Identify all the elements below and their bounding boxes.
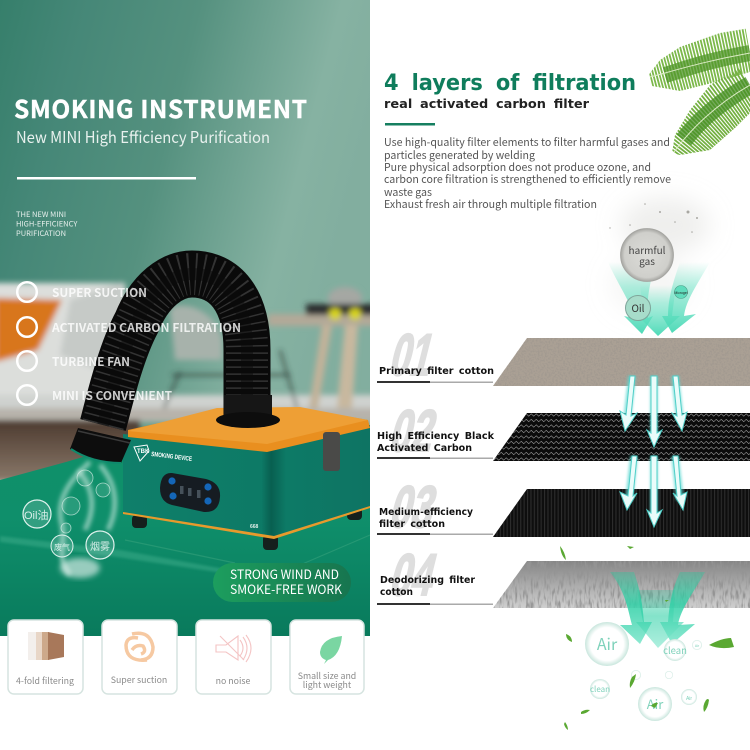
smoke bubble: oil: Oil油 bbox=[24, 508, 48, 522]
flow arrows layer 1 to 2 bbox=[620, 376, 687, 447]
layer label: cotton bbox=[380, 587, 413, 598]
layer surface bbox=[493, 338, 750, 386]
smoke bubble: smoke: 烟雾 bbox=[90, 540, 110, 553]
intake arrows bbox=[608, 262, 710, 336]
heading: 4 layers of filtration bbox=[384, 71, 636, 96]
bubble: air bottom: Air bbox=[647, 694, 664, 713]
leader line bbox=[377, 457, 493, 459]
layer label: Primary filter cotton bbox=[379, 366, 494, 377]
falling leaves bbox=[560, 546, 734, 730]
leader line bbox=[377, 381, 493, 383]
green rule bbox=[385, 123, 435, 126]
smoke cloud bbox=[609, 197, 710, 315]
card: small size bbox=[290, 620, 364, 694]
smoke bubbles: small bbox=[61, 470, 110, 533]
feature list: TURBINE FAN bbox=[52, 353, 130, 370]
outflow arrows bbox=[610, 572, 705, 648]
bubble: harmful gas: gas bbox=[639, 253, 655, 268]
model label: 668 bbox=[250, 524, 259, 530]
machine body bbox=[123, 425, 370, 537]
control display bbox=[160, 473, 220, 512]
feature list: ACTIVATED CARBON FILTRATION bbox=[51, 319, 241, 336]
layer label: Activated Carbon bbox=[377, 443, 472, 454]
bubble: microgel bbox=[674, 286, 688, 298]
hose bbox=[103, 274, 247, 425]
layer label: Medium-efficiency bbox=[379, 507, 474, 518]
bubble: air large: Air bbox=[597, 631, 618, 655]
card: small size: Small size and bbox=[298, 669, 356, 682]
card: no noise bbox=[196, 620, 271, 694]
layer surface bbox=[493, 413, 750, 461]
green table bbox=[0, 440, 370, 636]
bubble: air small: Air bbox=[686, 696, 692, 702]
bubble: harmful gas: harmful bbox=[628, 242, 666, 257]
panel: filtration bbox=[377, 53, 750, 730]
blurred room background bbox=[0, 282, 380, 482]
description: Use high-quality filter elements to filter harmful gases and bbox=[384, 134, 670, 150]
hose nozzle bbox=[70, 428, 131, 463]
bubble: microgel: Microgel bbox=[674, 291, 688, 295]
layer surface bbox=[493, 561, 750, 608]
orange lid bbox=[128, 417, 370, 452]
feature cards bbox=[8, 620, 364, 694]
description: waste gas bbox=[384, 184, 432, 200]
small caption: HIGH-EFFICIENCY bbox=[16, 218, 77, 230]
leader line bbox=[377, 533, 493, 535]
handle bbox=[323, 432, 340, 471]
ghost number 04: 04 bbox=[385, 543, 443, 609]
callout pill: SMOKE-FREE WORK bbox=[230, 579, 343, 598]
air bubbles bbox=[585, 622, 702, 721]
feature list: MINI IS CONVENIENT bbox=[52, 387, 172, 404]
bubble: clean tiny bbox=[631, 670, 673, 680]
card: 4-fold filtering bbox=[8, 620, 83, 694]
wall background bbox=[0, 0, 370, 430]
layer 4 bbox=[377, 543, 750, 609]
card: super suction: Super suction bbox=[111, 673, 167, 686]
card: 4-fold filtering: 4-fold filtering bbox=[16, 674, 74, 687]
layer surface bbox=[493, 489, 750, 537]
layer 1 bbox=[377, 323, 750, 389]
subtitle: New MINI High Efficiency Purification bbox=[16, 124, 270, 148]
palm leaves bbox=[650, 53, 750, 152]
ghost number 03: 03 bbox=[385, 475, 443, 541]
ghost number 02: 02 bbox=[385, 399, 443, 465]
divider bbox=[17, 177, 196, 180]
description: Pure physical adsorption does not produce ozone, and bbox=[384, 159, 651, 175]
subheading: real activated carbon filter bbox=[384, 97, 589, 111]
bubble: oil bbox=[626, 296, 650, 320]
bubble: air tiny: Air bbox=[695, 644, 700, 648]
logo: TBK bbox=[137, 449, 150, 455]
feature list: SUPER SUCTION bbox=[52, 284, 147, 301]
machine feet bbox=[132, 510, 362, 550]
icon: swirl bbox=[126, 633, 153, 660]
lid top face bbox=[128, 407, 368, 444]
smoking instrument machine bbox=[123, 407, 370, 550]
icon: filter layers bbox=[28, 632, 64, 660]
bubble: clean top: clean bbox=[663, 643, 687, 657]
description: Exhaust fresh air through multiple filtration bbox=[384, 196, 597, 212]
smoke bbox=[23, 462, 115, 578]
layer 2 bbox=[377, 399, 750, 465]
feature list bbox=[17, 282, 241, 405]
leader line bbox=[377, 603, 493, 605]
description: particles generated by welding bbox=[384, 147, 536, 163]
icon: speaker bbox=[216, 635, 251, 662]
card: super suction bbox=[102, 620, 177, 694]
callout pill bbox=[213, 563, 351, 602]
small caption: PURIFICATION bbox=[16, 228, 66, 239]
bubble: clean left: clean bbox=[590, 684, 610, 695]
layer 3 bbox=[377, 475, 750, 541]
logo bbox=[134, 445, 193, 463]
bubble: oil: Oil bbox=[631, 300, 645, 315]
hose collar bbox=[216, 395, 280, 428]
smoke bubble: waste gas: 废气 bbox=[54, 542, 70, 552]
table reflections bbox=[0, 535, 370, 574]
description bbox=[384, 134, 671, 212]
description: carbon core filtration is strengthened to efficiently remove bbox=[384, 171, 671, 187]
logo: SMOKING DEVICE bbox=[151, 451, 193, 463]
card: no noise: no noise bbox=[216, 674, 251, 687]
layer label: High Efficiency Black bbox=[377, 431, 495, 442]
layer label: filter cotton bbox=[379, 519, 445, 530]
bubble: harmful gas bbox=[620, 228, 674, 282]
flow arrows layer 2 to 3 bbox=[620, 456, 687, 527]
small caption: THE NEW MINI bbox=[16, 209, 66, 220]
ghost number 01: 01 bbox=[385, 323, 441, 389]
icon: leaf bbox=[320, 636, 342, 664]
orange bottom trim bbox=[123, 506, 370, 539]
panel: product scene bbox=[0, 0, 380, 636]
callout pill: STRONG WIND AND bbox=[230, 564, 339, 583]
title: SMOKING INSTRUMENT bbox=[14, 91, 307, 126]
card: small size: light weight bbox=[303, 678, 352, 691]
layer label: Deodorizing filter bbox=[380, 575, 475, 586]
